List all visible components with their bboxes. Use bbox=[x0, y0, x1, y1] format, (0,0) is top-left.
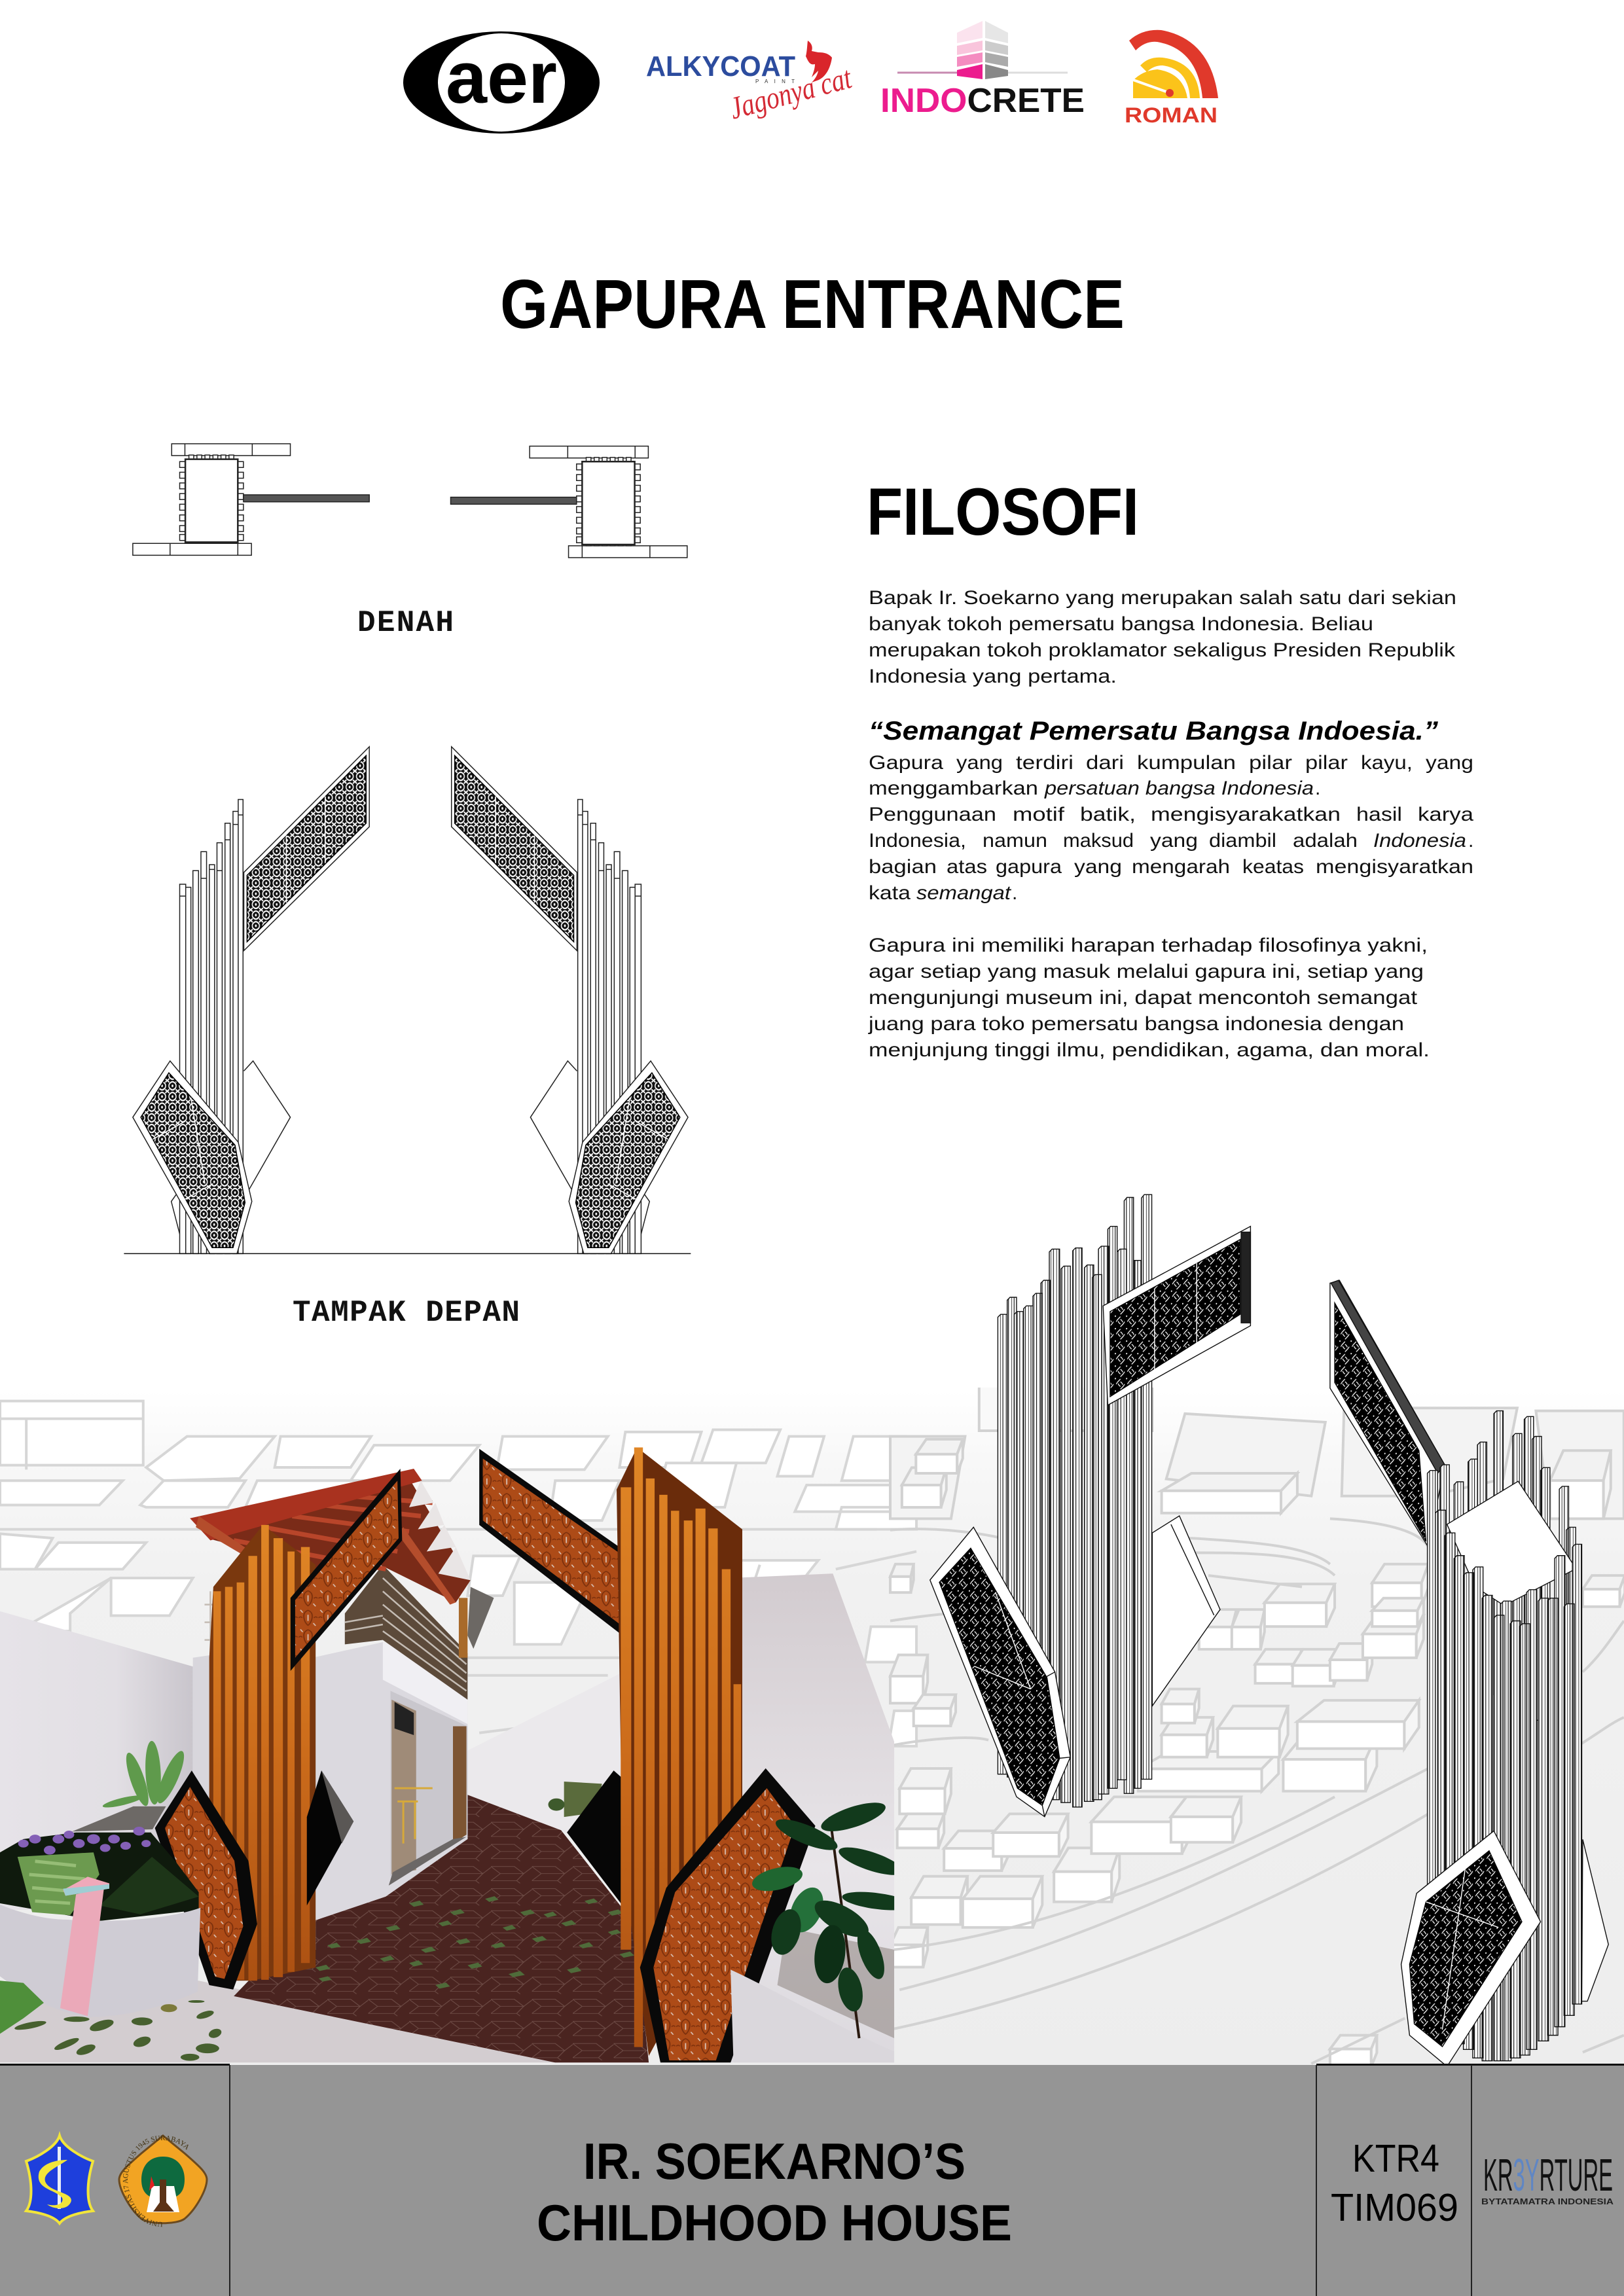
left lower hex batik panel bbox=[155, 1770, 257, 1990]
text block: meaning paragraph: persatuan bangsa Indonesia bbox=[1044, 778, 1314, 799]
text block: meaning paragraph: . bbox=[1468, 830, 1473, 852]
logo: indocrete bbox=[880, 21, 1085, 120]
drawing: isometric gate right bbox=[1330, 1280, 1608, 2066]
logo: alkycoat: ALKYCOAT bbox=[646, 50, 795, 82]
right lower hex batik panel bbox=[640, 1768, 816, 2062]
text block: meaning paragraph: gapura bbox=[996, 856, 1062, 878]
footer title bbox=[537, 2132, 1012, 2251]
city context background bbox=[0, 1346, 1624, 2068]
emblem: university seal: UNIVERSITAS 17 AGUSTUS 1945 SURABAYA bbox=[123, 2135, 189, 2227]
text block: meaning paragraph: pilar bbox=[1305, 752, 1348, 774]
text block: meaning paragraph: yang bbox=[1150, 830, 1198, 852]
emblem: surabaya shield bbox=[26, 2136, 93, 2223]
text block: meaning paragraph: kata bbox=[869, 882, 911, 904]
right pillars bbox=[617, 1448, 742, 2056]
text block: intro paragraph: Indonesia yang pertama. bbox=[869, 666, 1117, 687]
text block: meaning paragraph: dari bbox=[1086, 752, 1124, 774]
text block: meaning paragraph: terdiri bbox=[1016, 752, 1074, 774]
text block: meaning paragraph bbox=[869, 752, 1473, 904]
left diamond shadow panel bbox=[307, 1770, 353, 1905]
footer title: IR. SOEKARNO’S bbox=[583, 2132, 965, 2190]
roof bbox=[210, 1479, 471, 1602]
text block: meaning paragraph: yang bbox=[1074, 856, 1122, 878]
text block: meaning paragraph: bagian bbox=[869, 856, 937, 878]
logo: roman bbox=[1125, 30, 1218, 127]
left top batik panel bbox=[291, 1469, 402, 1671]
left fern bbox=[101, 1741, 189, 1810]
drawing: tampak depan elevation bbox=[124, 747, 691, 1253]
text block: intro paragraph bbox=[869, 587, 1456, 687]
right wall bbox=[731, 1573, 894, 2062]
text block: meaning paragraph: Indonesia, bbox=[869, 830, 966, 852]
text block: meaning paragraph: hasil bbox=[1356, 804, 1402, 825]
logo: aer: aer bbox=[446, 37, 557, 118]
pink post bbox=[60, 1876, 109, 2016]
logo: alkycoat: Jagonya cat bbox=[726, 60, 856, 126]
text block: meaning paragraph: Gapura bbox=[869, 752, 943, 774]
footer title: CHILDHOOD HOUSE bbox=[537, 2194, 1012, 2251]
text block: meaning paragraph: pilar bbox=[1249, 752, 1292, 774]
text block: meaning paragraph: atas bbox=[947, 856, 987, 878]
text block: meaning paragraph: semangat bbox=[916, 882, 1012, 904]
right top batik panel bbox=[479, 1449, 628, 1640]
left pillars bbox=[209, 1525, 316, 1981]
text block: meaning paragraph: yang bbox=[956, 752, 1003, 774]
text block: hope paragraph bbox=[868, 935, 1430, 1061]
heading: filosofi: FILOSOFI bbox=[867, 475, 1139, 549]
footer bar bbox=[0, 2064, 1624, 2296]
logo: alkycoat: PAINT bbox=[755, 79, 795, 84]
title: GAPURA ENTRANCE bbox=[500, 266, 1125, 343]
flower bed bbox=[0, 1827, 199, 1921]
text block: intro paragraph: merupakan tokoh proklamator sekaligus Presiden Republik bbox=[869, 639, 1456, 661]
team code: KTR4 bbox=[1352, 2137, 1439, 2180]
ground slab bbox=[0, 1981, 585, 2062]
text block: meaning paragraph: mengisyarakatkan bbox=[1151, 804, 1341, 825]
logo: kryarture: BYTATAMATRA INDONESIA bbox=[1481, 2197, 1614, 2206]
text block: hope paragraph: juang para toko pemersatu bangsa indonesia dengan bbox=[868, 1013, 1404, 1035]
far corridor wall bbox=[508, 1727, 607, 1731]
text block: meaning paragraph: kumpulan bbox=[1137, 752, 1236, 774]
text block: intro paragraph: banyak tokoh pemersatu bangsa Indonesia. Beliau bbox=[869, 613, 1373, 635]
text block: meaning paragraph: Penggunaan bbox=[869, 804, 996, 825]
text block: meaning paragraph: menggambarkan bbox=[869, 778, 1038, 799]
team code bbox=[1331, 2137, 1458, 2229]
shop opening bbox=[390, 1691, 467, 1876]
text block: meaning paragraph: batik, bbox=[1080, 804, 1136, 825]
text block: meaning paragraph: diambil bbox=[1209, 830, 1276, 852]
text block: intro paragraph: Bapak Ir. Soekarno yang merupakan salah satu dari sekian bbox=[869, 587, 1456, 609]
text block: meaning paragraph: . bbox=[1012, 882, 1017, 904]
text block: meaning paragraph: yang bbox=[1426, 752, 1473, 774]
text block: hope paragraph: agar setiap yang masuk melalui gapura ini, setiap yang bbox=[869, 961, 1424, 982]
text block: meaning paragraph: mengisyaratkan bbox=[1316, 856, 1473, 878]
right foliage bbox=[748, 1797, 913, 2038]
right foreground planter bbox=[778, 1928, 894, 2038]
text block: hope paragraph: mengunjungi museum ini, dapat mencontoh semangat bbox=[869, 987, 1418, 1009]
text block: meaning paragraph: Indonesia bbox=[1373, 830, 1466, 852]
text block: meaning paragraph: karya bbox=[1418, 804, 1473, 825]
balcony railing bbox=[345, 1565, 467, 1700]
text block: meaning paragraph: namun bbox=[983, 830, 1047, 852]
logo: roman: ROMAN bbox=[1125, 103, 1218, 127]
right diamond shadow panel bbox=[567, 1770, 636, 1923]
far plants bbox=[564, 1782, 602, 1817]
label: denah: DENAH bbox=[357, 606, 454, 640]
quote heading: “Semangat Pemersatu Bangsa Indoesia.” bbox=[869, 717, 1438, 745]
brick paving bbox=[234, 1795, 649, 2062]
drawing: isometric gate left bbox=[930, 1194, 1250, 1817]
text block: hope paragraph: menjunjung tinggi ilmu, pendidikan, agama, dan moral. bbox=[869, 1039, 1430, 1061]
team code: TIM069 bbox=[1331, 2186, 1458, 2229]
gate left elevation bbox=[133, 747, 369, 1253]
logo: indocrete: INDOCRETE bbox=[880, 82, 1085, 120]
text block: meaning paragraph: keatas bbox=[1242, 856, 1304, 878]
text block: hope paragraph: Gapura ini memiliki harapan terhadap filosofinya yakni, bbox=[869, 935, 1428, 956]
curved planter bbox=[0, 1905, 200, 2017]
text block: meaning paragraph: adalah bbox=[1293, 830, 1358, 852]
left wall bbox=[0, 1611, 193, 1910]
drawing: denah floor plan bbox=[133, 444, 687, 558]
logo: alkycoat bbox=[646, 41, 856, 126]
text block: meaning paragraph: mengarah bbox=[1132, 856, 1230, 878]
text block: meaning paragraph: maksud bbox=[1063, 830, 1134, 852]
label: tampak depan: TAMPAK DEPAN bbox=[293, 1296, 520, 1330]
text block: meaning paragraph: motif bbox=[1013, 804, 1065, 825]
grass and foreground leaves bbox=[0, 1981, 224, 2061]
building bbox=[307, 1642, 467, 1923]
render: gate entrance photo bbox=[0, 1448, 913, 2062]
fallen leaves bbox=[316, 1896, 634, 1988]
logo: aer bbox=[403, 31, 600, 134]
text block: meaning paragraph: . bbox=[1315, 778, 1320, 799]
text block: meaning paragraph: kayu, bbox=[1361, 752, 1413, 774]
